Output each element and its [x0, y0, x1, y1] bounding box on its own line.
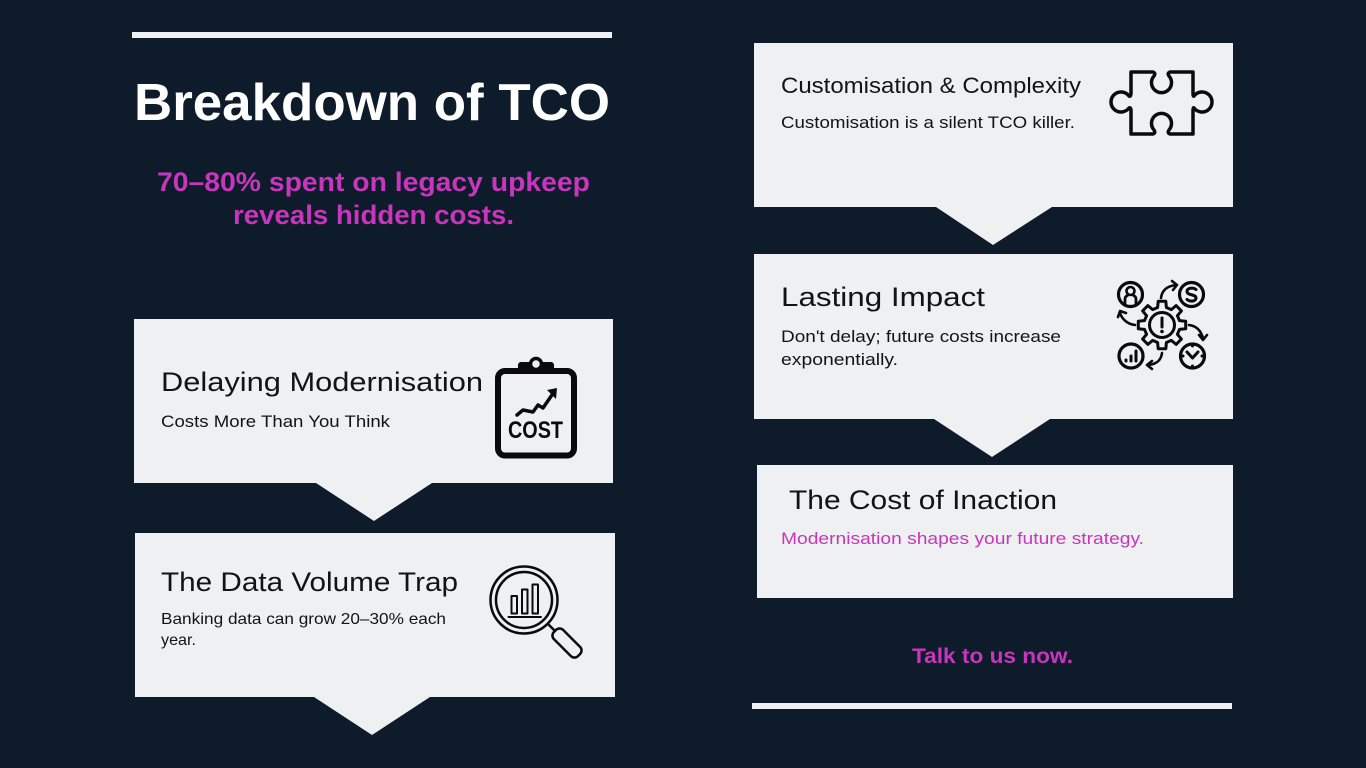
call to action: Talk to us now.: [912, 645, 1073, 668]
heading: lasting impact: Lasting Impact: [781, 282, 986, 312]
text: lasting impact: [781, 327, 1061, 369]
panel: cost of inaction: [757, 465, 1233, 598]
icon: magnifier with bars: [490, 566, 584, 660]
icon: cost clipboard: COST: [508, 417, 563, 444]
icon: gear with cycle: [1118, 281, 1207, 369]
panel: customisation and complexity: [754, 43, 1233, 245]
text: data volume trap: year.: [161, 632, 196, 649]
heading: cost of inaction: The Cost of Inaction: [789, 485, 1057, 515]
text: lasting impact: exponentially.: [781, 350, 898, 369]
panel: delaying modernisation: [134, 319, 613, 521]
subtitle: [157, 167, 590, 230]
text: data volume trap: [161, 611, 446, 649]
text: customisation: Customisation is a silent TCO killer.: [781, 113, 1075, 132]
icon: cost clipboard: [498, 358, 574, 456]
text: cost of inaction: Modernisation shapes your future strategy.: [781, 529, 1144, 548]
panel: data volume trap: [135, 533, 615, 735]
text: data volume trap: Banking data can grow 20–30% each: [161, 611, 446, 628]
panel: lasting impact: [754, 254, 1233, 457]
heading: delaying modernisation: Delaying Modernisation: [161, 367, 483, 397]
icon: puzzle piece: [1111, 72, 1212, 134]
text: lasting impact: Don't delay; future costs increase: [781, 327, 1061, 346]
text: delaying modernisation: Costs More Than You Think: [161, 412, 391, 431]
heading: data volume trap: The Data Volume Trap: [161, 567, 458, 597]
heading: customisation and complexity: Customisation & Complexity: [781, 73, 1081, 98]
subtitle: 70–80% spent on legacy upkeep: [157, 167, 590, 197]
title: Breakdown of TCO: [134, 74, 610, 132]
subtitle: reveals hidden costs.: [233, 200, 514, 230]
